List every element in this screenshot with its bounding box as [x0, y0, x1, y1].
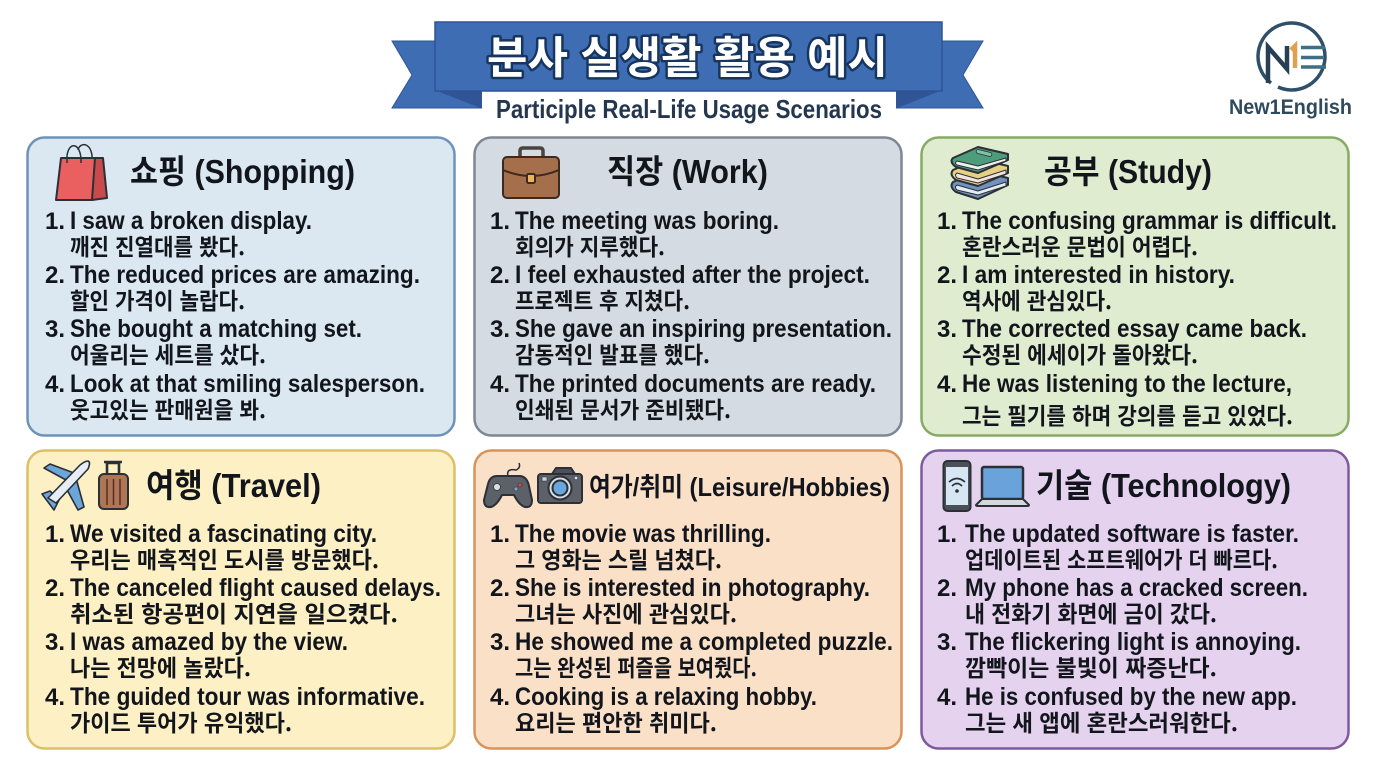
item 1: 1. — [45, 208, 65, 235]
item 4 — [490, 683, 817, 738]
item 3: He showed me a completed puzzle. — [515, 628, 893, 656]
item 1: 1. — [937, 521, 957, 548]
icon: stacked books — [952, 147, 1008, 199]
item 1: 회의가 지루했다. — [515, 228, 665, 262]
item 3: The corrected essay came back. — [962, 315, 1307, 343]
item 2: 2. — [45, 262, 65, 289]
item 3: 3. — [45, 629, 65, 656]
item 3: 3. — [937, 316, 957, 343]
item 4: The guided tour was informative. — [70, 683, 425, 711]
item 4: 4. — [490, 684, 510, 711]
heading: technology: 기술 (Technology) — [1036, 467, 1291, 504]
icon: suitcase — [99, 462, 128, 509]
item 4: 그는 새 앱에 혼란스러워한다. — [965, 704, 1238, 738]
item 2: 2. — [490, 262, 510, 289]
item 1: 혼란스러운 문법이 어렵다. — [962, 228, 1198, 262]
item 2: 2. — [937, 262, 957, 289]
item 3: 3. — [490, 629, 510, 656]
item 4: 웃고있는 판매원을 봐. — [70, 391, 266, 425]
item 4: 4. — [490, 371, 510, 398]
heading: work: 직장 (Work) — [607, 153, 768, 190]
item 4: The printed documents are ready. — [515, 370, 876, 398]
item 3: 수정된 에세이가 돌아왔다. — [962, 336, 1198, 370]
item 1: 1. — [490, 521, 510, 548]
icon: camera — [538, 468, 582, 503]
item 4: 가이드 투어가 유익했다. — [70, 704, 292, 738]
item 2: The canceled flight caused delays. — [70, 574, 441, 602]
title banner — [392, 22, 983, 108]
item 3: She gave an inspiring presentation. — [515, 315, 892, 343]
panel: study — [922, 138, 1348, 436]
item 1: 그 영화는 스릴 넘쳤다. — [515, 541, 722, 575]
heading: shopping: 쇼핑 (Shopping) — [130, 153, 355, 190]
item 3: 나는 전망에 놀랐다. — [70, 649, 251, 683]
item 3: 감동적인 발표를 했다. — [515, 336, 710, 370]
item 2 — [937, 261, 1235, 316]
item 4 — [937, 683, 1297, 738]
heading: travel: 여행 (Travel) — [146, 467, 321, 504]
item 2: 프로젝트 후 지쳤다. — [515, 282, 690, 316]
icon: briefcase — [503, 148, 559, 198]
item 2: 그녀는 사진에 관심있다. — [515, 595, 737, 629]
item 3 — [937, 628, 1301, 683]
heading: study: 공부 (Study) — [1044, 153, 1212, 190]
item 1: The updated software is faster. — [965, 520, 1299, 548]
item 3 — [937, 315, 1307, 370]
item 1: The confusing grammar is difficult. — [962, 207, 1337, 235]
item 1 — [490, 207, 779, 262]
item 3 — [490, 628, 893, 683]
item 2 — [490, 261, 870, 316]
item 1 — [937, 520, 1299, 575]
item 4 — [937, 370, 1293, 431]
item 2: I feel exhausted after the project. — [515, 261, 870, 289]
item 4: He is confused by the new app. — [965, 683, 1297, 711]
panel: shopping — [28, 138, 454, 436]
item 2 — [490, 574, 870, 629]
icon: airplane — [42, 461, 90, 510]
item 4: 4. — [937, 371, 957, 398]
item 4 — [45, 683, 425, 738]
panel: travel — [28, 450, 454, 748]
item 4: Cooking is a relaxing hobby. — [515, 683, 817, 711]
item 1: The movie was thrilling. — [515, 520, 771, 548]
subtitle: Participle Real-Life Usage Scenarios — [496, 94, 882, 124]
item 4 — [45, 370, 425, 425]
item 4: 4. — [45, 371, 65, 398]
logo: New1English — [1229, 23, 1352, 119]
panel: leisure — [474, 450, 902, 748]
logo: New1English: New1English — [1229, 96, 1352, 119]
item 3 — [45, 628, 348, 683]
item 4 — [490, 370, 876, 425]
item 1: We visited a fascinating city. — [70, 520, 377, 548]
icon: shopping bag — [56, 145, 107, 200]
item 3: The flickering light is annoying. — [965, 628, 1301, 656]
item 1: 1. — [45, 521, 65, 548]
item 3 — [490, 315, 892, 370]
item 2: I am interested in history. — [962, 261, 1235, 289]
item 2: 할인 가격이 놀랍다. — [70, 282, 245, 316]
item 2: 역사에 관심있다. — [962, 282, 1112, 316]
title text: 분사 실생활 활용 예시 — [487, 22, 888, 86]
item 3: 3. — [490, 316, 510, 343]
item 3: 3. — [937, 629, 957, 656]
item 4: 4. — [937, 684, 957, 711]
item 3: 어울리는 세트를 샀다. — [70, 336, 266, 370]
item 1: 1. — [490, 208, 510, 235]
item 2 — [45, 261, 420, 316]
item 4: He was listening to the lecture, — [962, 370, 1292, 398]
item 4: Look at that smiling salesperson. — [70, 370, 425, 398]
item 2 — [45, 574, 441, 629]
item 1: 1. — [937, 208, 957, 235]
item 1: 우리는 매혹적인 도시를 방문했다. — [70, 541, 379, 575]
item 3: 그는 완성된 퍼즐을 보여줬다. — [515, 649, 757, 683]
item 1 — [45, 207, 312, 262]
item 1 — [45, 520, 379, 575]
item 1: I saw a broken display. — [70, 207, 312, 235]
item 1 — [937, 207, 1337, 262]
item 1: 업데이트된 소프트웨어가 더 빠르다. — [965, 541, 1278, 575]
item 3: I was amazed by the view. — [70, 628, 348, 656]
item 3: 3. — [45, 316, 65, 343]
item 2: 내 전화기 화면에 금이 갔다. — [965, 595, 1217, 629]
icon: smartphone — [944, 461, 970, 511]
item 2: The reduced prices are amazing. — [70, 261, 420, 289]
item 4: 4. — [45, 684, 65, 711]
item 2: 취소된 항공편이 지연을 일으켰다. — [70, 595, 398, 629]
item 2: My phone has a cracked screen. — [965, 574, 1308, 602]
item 2: 2. — [937, 575, 957, 602]
item 3 — [45, 315, 362, 370]
panel: technology — [922, 450, 1348, 748]
item 2: 2. — [45, 575, 65, 602]
item 4: 그는 필기를 하며 강의를 듣고 있었다. — [962, 397, 1293, 431]
item 2: 2. — [490, 575, 510, 602]
item 2: She is interested in photography. — [515, 574, 870, 602]
item 1 — [490, 520, 771, 575]
item 3: 깜빡이는 불빛이 짜증난다. — [965, 649, 1217, 683]
item 1: The meeting was boring. — [515, 207, 779, 235]
item 4: 요리는 편안한 취미다. — [515, 704, 717, 738]
icon: game controller — [484, 463, 532, 507]
item 1: 깨진 진열대를 봤다. — [70, 228, 245, 262]
heading: leisure: 여가/취미 (Leisure/Hobbies) — [589, 472, 890, 502]
icon: laptop — [976, 467, 1029, 506]
item 3: She bought a matching set. — [70, 315, 362, 343]
item 4: 인쇄된 문서가 준비됐다. — [515, 391, 731, 425]
item 2 — [937, 574, 1308, 629]
panel: work — [474, 138, 902, 436]
